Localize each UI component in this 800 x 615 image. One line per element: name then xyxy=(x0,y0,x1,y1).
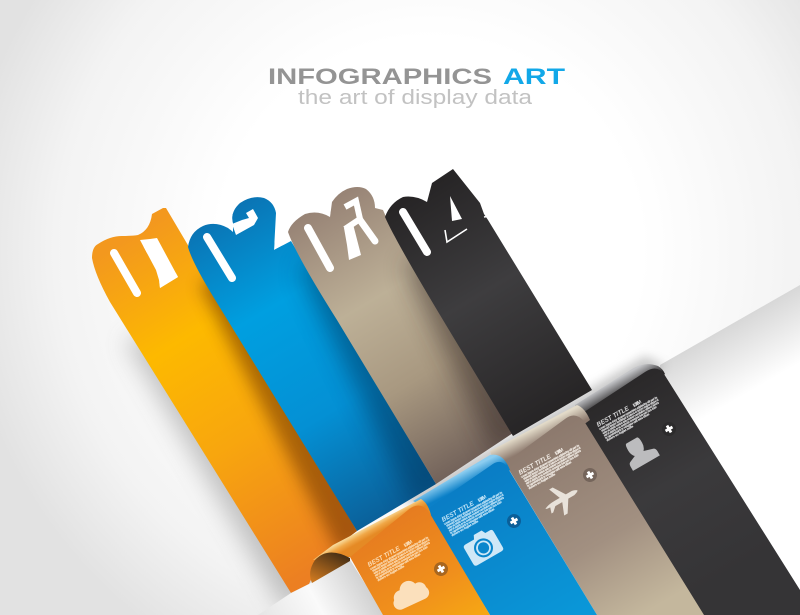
strip panel xyxy=(426,462,597,615)
front strip: orange xyxy=(310,499,490,615)
text block: LOREM xyxy=(554,447,565,457)
text block: BEST TITLE xyxy=(441,500,476,524)
text block: nisi ut aliquip ex ea commodo consequat duis aute irure dolor xyxy=(525,453,580,486)
icon: camera xyxy=(461,526,504,567)
text block: dolore eu fugiat nulla xyxy=(451,519,479,537)
text block: Lorem ipsum dolor sit amet consectetur adipiscing elit sed do xyxy=(598,395,658,431)
plus button xyxy=(431,559,451,579)
strip 03 back xyxy=(288,187,512,484)
text block: nisi ut aliquip ex ea commodo consequat duis aute irure dolor xyxy=(374,545,429,578)
plus button xyxy=(504,511,524,531)
text block: eiusmod tempor incididunt ut labore et dolore magna aliqua ut xyxy=(600,398,659,433)
text block: LOREM xyxy=(477,494,488,504)
text block: Lorem ipsum dolor sit amet consectetur adipiscing elit sed do xyxy=(369,535,429,571)
fold xyxy=(313,499,431,560)
text block: eiusmod tempor incididunt ut labore et dolore magna aliqua ut xyxy=(522,446,581,481)
number 04: 0 xyxy=(374,183,457,283)
front strip: dark xyxy=(575,364,800,615)
fold xyxy=(490,405,590,470)
number 02 xyxy=(203,209,282,282)
strip panel xyxy=(575,368,800,615)
heading: infographics art: INFOGRAPHICS xyxy=(268,64,492,89)
text block: enim ad minim veniam quis nostrud exercitation ullamco laboris xyxy=(524,449,582,483)
text block: Lorem ipsum dolor sit amet consectetur adipiscing elit sed do xyxy=(443,490,503,526)
icon: plane xyxy=(538,478,585,522)
front strip: blue xyxy=(413,455,597,615)
number 02: 2 xyxy=(212,183,295,283)
lower background wedge xyxy=(258,560,385,615)
shadow under strips xyxy=(125,330,665,612)
number 03: 0 xyxy=(278,199,361,299)
soft shade xyxy=(194,275,357,549)
number 04: 4 xyxy=(409,161,492,261)
strip 04 back xyxy=(374,161,592,436)
number 02: 0 xyxy=(178,208,262,308)
fold xyxy=(413,455,510,515)
number 03: 3 xyxy=(314,173,397,273)
fold xyxy=(575,364,665,420)
text block: nisi ut aliquip ex ea commodo consequat duis aute irure dolor xyxy=(603,405,658,438)
curl xyxy=(310,552,350,583)
number 03 xyxy=(304,196,378,272)
text block xyxy=(518,439,587,491)
text block: dolore eu fugiat nulla xyxy=(528,472,556,490)
text block: in reprehenderit in voluptate velit esse cillum xyxy=(375,552,421,580)
text block: Lorem ipsum dolor sit amet consectetur adipiscing elit sed do xyxy=(520,443,580,479)
text block xyxy=(441,486,510,538)
strip panel xyxy=(350,505,490,615)
strip 02 back xyxy=(188,197,436,531)
soft shade xyxy=(397,253,512,450)
title xyxy=(268,64,566,109)
text block: BEST TITLE xyxy=(596,405,631,429)
subtitle: the art of display data xyxy=(298,87,533,109)
strip body xyxy=(385,169,592,436)
strip body xyxy=(188,197,436,531)
text block xyxy=(596,391,665,443)
text block: nisi ut aliquip ex ea commodo consequat duis aute irure dolor xyxy=(448,500,503,533)
strip body xyxy=(288,187,513,484)
strip panel xyxy=(505,415,704,615)
text block: enim ad minim veniam quis nostrud exercitation ullamco laboris xyxy=(447,496,505,530)
text block: BEST TITLE xyxy=(367,545,402,569)
icon: cloud xyxy=(387,574,431,612)
front strip: tan xyxy=(490,405,704,615)
heading: infographics art xyxy=(268,64,566,89)
plus button xyxy=(580,465,600,485)
text block: eiusmod tempor incididunt ut labore et dolore magna aliqua ut xyxy=(445,493,504,528)
text block: eiusmod tempor incididunt ut labore et dolore magna aliqua ut xyxy=(371,538,430,573)
heading: infographics art: ART xyxy=(503,64,566,89)
number 01: 0 xyxy=(84,224,168,324)
text block: enim ad minim veniam quis nostrud exercitation ullamco laboris xyxy=(602,401,660,435)
text block: in reprehenderit in voluptate velit esse cillum xyxy=(604,412,650,440)
number 04 xyxy=(399,196,486,256)
text block: in reprehenderit in voluptate velit esse cillum xyxy=(526,460,572,488)
number 01 xyxy=(110,238,178,297)
icon: person xyxy=(620,432,660,471)
text block: in reprehenderit in voluptate velit esse cillum xyxy=(449,507,495,535)
text block: dolore eu fugiat nulla xyxy=(377,564,405,582)
plus button xyxy=(659,419,679,439)
strip 01 back xyxy=(92,208,357,593)
soft shade xyxy=(292,257,436,502)
text block xyxy=(367,531,436,583)
number 01: 1 xyxy=(123,219,196,306)
text block: enim ad minim veniam quis nostrud exercitation ullamco laboris xyxy=(373,541,431,575)
strip body xyxy=(92,208,357,593)
text block: dolore eu fugiat nulla xyxy=(606,424,634,442)
text block: LOREM xyxy=(403,539,414,549)
text block: LOREM xyxy=(632,399,643,409)
text block: BEST TITLE xyxy=(518,453,553,477)
